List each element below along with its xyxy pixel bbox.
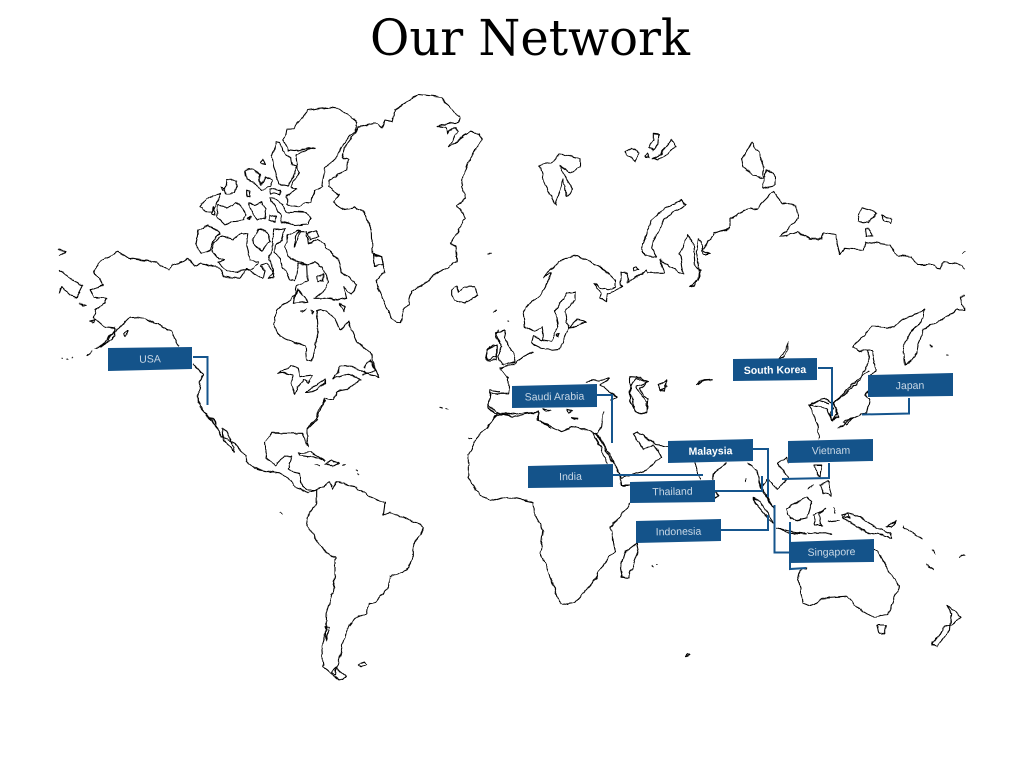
label: Japan bbox=[868, 373, 953, 397]
label: Japan: Japan bbox=[896, 380, 925, 392]
label: India: India bbox=[559, 471, 582, 483]
label: Vietnam: Vietnam bbox=[812, 445, 851, 457]
label: Malaysia: Malaysia bbox=[689, 445, 733, 458]
world map bbox=[59, 95, 965, 680]
map: Africa, South Asia, Southeast Asia and Oceania bbox=[468, 372, 964, 657]
label: Singapore: Singapore bbox=[807, 546, 856, 559]
label: India bbox=[528, 464, 613, 488]
title: Our Network bbox=[370, 9, 691, 67]
map: North America and Greenland bbox=[59, 95, 500, 430]
label: Malaysia bbox=[668, 439, 753, 463]
label: USA: USA bbox=[139, 353, 161, 366]
label: Vietnam bbox=[788, 439, 873, 463]
label: Saudi Arabia: Saudi Arabia bbox=[525, 390, 585, 404]
label: South Korea: South Korea bbox=[744, 364, 806, 377]
map: Europe, Russia and northern Asia bbox=[487, 133, 965, 428]
connector lines bbox=[193, 357, 909, 569]
label: Singapore bbox=[789, 539, 874, 563]
label: USA bbox=[108, 347, 192, 371]
label: Thailand bbox=[630, 480, 715, 503]
label: Saudi Arabia bbox=[512, 384, 597, 408]
label: Indonesia bbox=[636, 519, 721, 543]
map: Central and South America bbox=[200, 400, 424, 680]
label: Thailand: Thailand bbox=[652, 486, 693, 498]
label: Indonesia: Indonesia bbox=[656, 526, 702, 538]
label: South Korea bbox=[733, 358, 817, 381]
